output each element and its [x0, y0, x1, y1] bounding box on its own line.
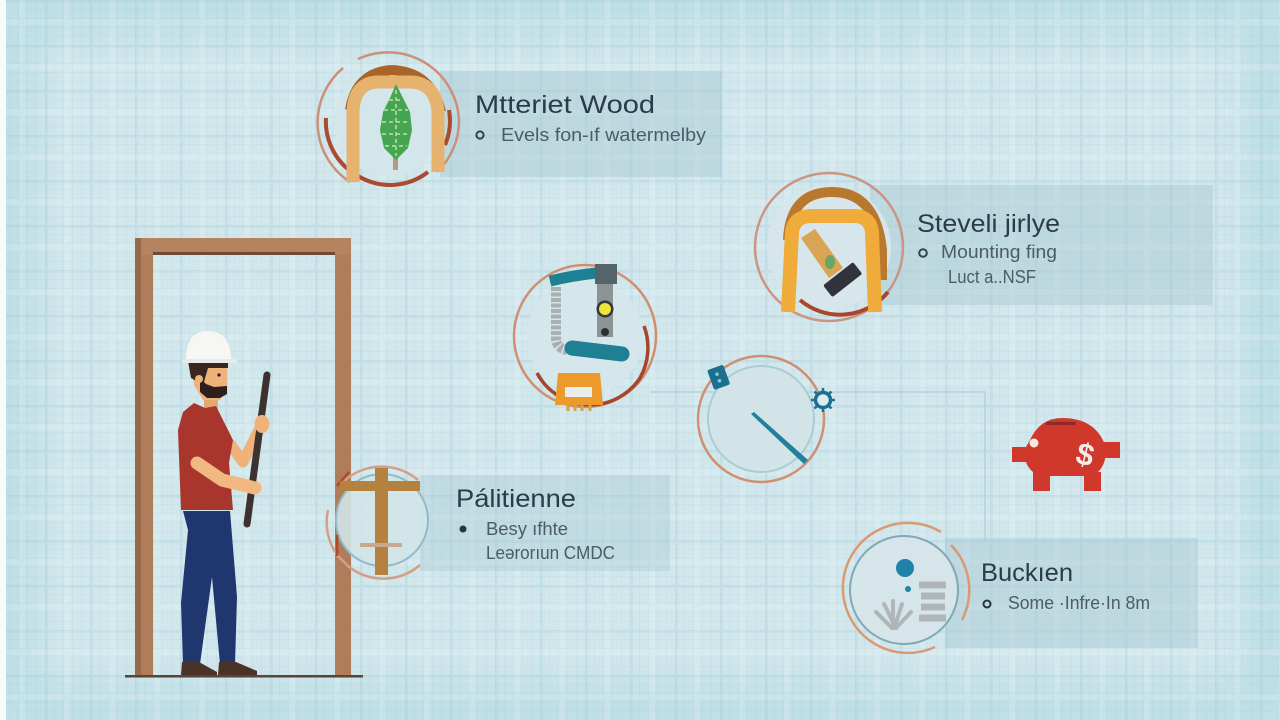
- back arm: [231, 424, 262, 462]
- worker figure: [178, 331, 270, 675]
- icon: budget circle: [843, 523, 969, 653]
- head: [188, 361, 228, 400]
- icon: timber cross circle: [327, 467, 428, 579]
- grey stack: [919, 585, 946, 618]
- icon: tool circle: [514, 264, 656, 411]
- helmet: [182, 331, 237, 363]
- shoes: [181, 662, 257, 675]
- icon: piggy bank: [1012, 418, 1120, 491]
- front arm: [197, 463, 255, 488]
- panel: fixings: [420, 475, 670, 571]
- grey hand: [876, 601, 911, 628]
- teal handle: [572, 348, 622, 354]
- shirt: [178, 403, 233, 510]
- heading: fixings: Pálitienne: [456, 485, 576, 513]
- upper hand: [254, 415, 270, 433]
- icon: door arch with hammer: [755, 173, 903, 321]
- coil: [556, 287, 567, 350]
- neck: [204, 394, 218, 410]
- heading: budget: Buckıen: [981, 559, 1073, 587]
- panel: mounting: [870, 185, 1213, 305]
- bullet and description: fixings: [460, 519, 615, 563]
- bullet and description: wood material: Evels fon-ıf watermelby: [501, 125, 706, 145]
- hose: [550, 273, 596, 281]
- heading: mounting: Steveli jirlye: [917, 210, 1060, 238]
- bullet and description: mounting: [919, 242, 1057, 287]
- bullet and description: fixings: Leərorıun CMDC: [486, 543, 615, 563]
- heading: wood material: Mtteriet Wood: [475, 91, 655, 119]
- gear: [811, 388, 835, 412]
- bullet and description: budget: Some ·Infre·In 8m: [1008, 593, 1150, 613]
- bullet and description: mounting: Mounting fing: [941, 242, 1057, 262]
- tag: [707, 365, 730, 390]
- rod: [247, 375, 267, 524]
- grey switch: [595, 264, 617, 337]
- blade: [751, 412, 808, 464]
- panel: wood material: [440, 71, 722, 177]
- doorframe: [125, 238, 363, 678]
- icon: tree: [380, 84, 412, 170]
- panel: budget: [945, 538, 1198, 648]
- icon: piggy bank: $: [1073, 435, 1098, 474]
- icon: door arch with tree: [318, 52, 459, 185]
- bullet and description: mounting: Luct a..NSF: [948, 267, 1036, 287]
- trousers: [181, 511, 237, 664]
- orange clamp: [555, 373, 603, 411]
- icon: hammer: [801, 229, 862, 297]
- bullet and description: fixings: Besy ıfhte: [486, 519, 568, 539]
- icon: blade circle: [698, 356, 835, 482]
